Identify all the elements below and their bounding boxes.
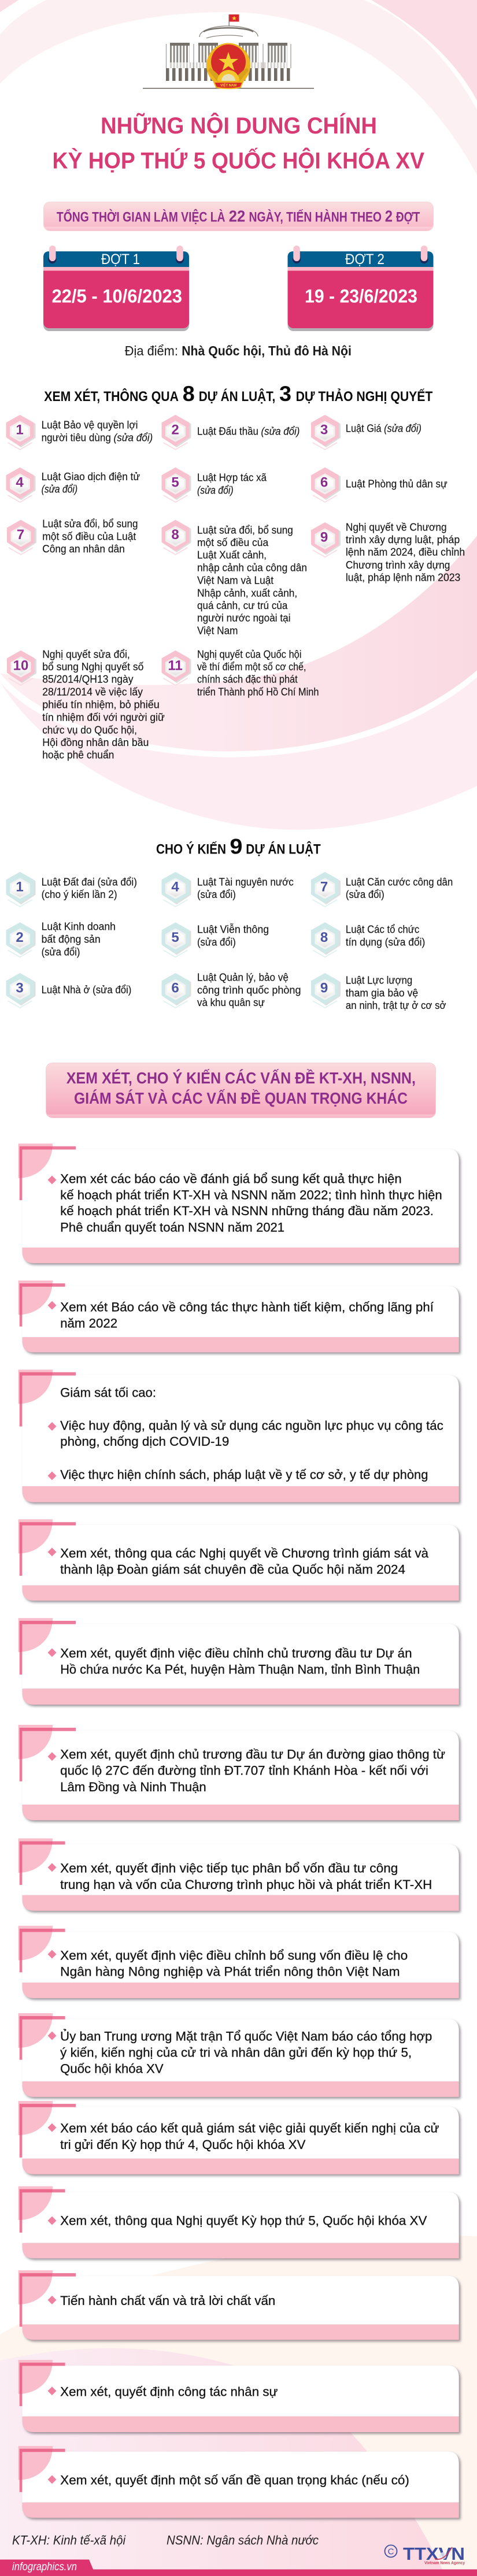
logo: TTXVN: C — [388, 2547, 394, 2556]
card 4: Xem xét, thông qua các Nghị quyết về Chương trình giám sát và — [60, 1546, 429, 1560]
opinion item 7: 7 — [320, 879, 328, 894]
law item 5: 5 — [171, 475, 179, 490]
law item 5: Luật Hợp tác xã — [197, 472, 267, 484]
opinion item 2: bất động sản — [42, 933, 101, 945]
resolution item 9: Chương trình xây dựng — [346, 559, 450, 571]
card 3: supreme supervision: Việc thực hiện chính sách, pháp luật về y tế cơ sở, y tế dự phòng — [60, 1468, 428, 1482]
card 9: Quốc hội khóa XV — [60, 2061, 164, 2076]
law item 6 — [312, 468, 448, 502]
opinion item 9: tham gia bảo vệ — [346, 986, 418, 999]
law item 8: Luật Xuất cảnh, — [197, 549, 267, 561]
card 1: kế hoạch phát triển KT-XH và NSNN năm 2022; tình hình thực hiện — [60, 1188, 442, 1202]
resolution item 10: Hội đồng nhân dân bầu — [42, 736, 149, 748]
card 14: Xem xét, quyết định một số vấn đề quan trọng khác (nếu có) — [60, 2473, 409, 2487]
law item 8: Luật sửa đổi, bổ sung — [197, 524, 293, 536]
law item 2: 2 — [171, 422, 179, 438]
card 8: Xem xét, quyết định việc điều chỉnh bổ sung vốn điều lệ cho — [60, 1948, 408, 1962]
calendar card: phase 1: ĐỢT 1 — [101, 251, 140, 268]
card 14 — [19, 2446, 459, 2518]
opinion item 5: Luật Viễn thông — [197, 923, 269, 936]
resolution item 9: 9 — [320, 529, 328, 545]
opinion item 2: Luật Kinh doanh — [42, 920, 116, 933]
opinion item 8: tín dụng (sửa đổi) — [346, 936, 425, 948]
resolution item 9: trình xây dựng luật, pháp — [346, 533, 460, 545]
opinion item 4: (sửa đổi) — [197, 888, 236, 900]
opinion item 6 — [162, 971, 301, 1008]
law item 8: người nước ngoài tại — [197, 612, 291, 624]
opinion item 8: 8 — [320, 930, 328, 945]
card 7: Xem xét, quyết định việc tiếp tục phân bổ vốn đầu tư công — [60, 1861, 398, 1875]
resolution item 10: phiếu tín nhiệm, bỏ phiếu — [42, 699, 160, 711]
opinion item 5: 5 — [171, 930, 179, 945]
abbreviation notes: NSNN: Ngân sách Nhà nước — [167, 2533, 319, 2547]
opinion item 1: (cho ý kiến lần 2) — [42, 888, 117, 900]
calendar card: phase 1 — [43, 246, 189, 331]
opinion item 1: Luật Đất đai (sửa đổi) — [42, 875, 137, 888]
card 9: Ủy ban Trung ương Mặt trận Tổ quốc Việt Nam báo cáo tổng hợp — [60, 2029, 432, 2043]
opinion item 9: an ninh, trật tự ở cơ sở — [346, 999, 446, 1011]
card 3: supreme supervision: Giám sát tối cao: — [60, 1386, 156, 1400]
opinion item 8 — [312, 923, 425, 957]
calendar card: phase 2 — [288, 246, 434, 331]
location line: Nhà Quốc hội, Thủ đô Hà Nội — [182, 343, 352, 358]
opinion item 9: 9 — [320, 980, 328, 996]
law item 7: Công an nhân dân — [42, 543, 125, 555]
law item 8: Việt Nam — [197, 625, 238, 637]
card 5 — [19, 1618, 459, 1705]
opinion item 2 — [7, 920, 116, 957]
opinion item 2: 2 — [16, 930, 24, 945]
law item 1: 1 — [16, 422, 24, 438]
calendar card: phase 2: ĐỢT 2 — [345, 251, 384, 268]
card 7: trung hạn và vốn của Chương trình phục hồi và phát triển KT-XH — [60, 1877, 432, 1892]
opinion item 6: công trình quốc phòng — [197, 983, 301, 996]
banner: total working time: 2 — [385, 207, 393, 225]
location line: Địa điểm: — [125, 343, 178, 358]
law item 8: Việt Nam và Luật — [197, 574, 273, 586]
opinion item 6: 6 — [171, 980, 179, 996]
card 10: tri gửi đến Kỳ họp thứ 4, Quốc hội khóa XV — [60, 2137, 306, 2152]
opinion item 7: Luật Căn cước công dân — [346, 875, 453, 888]
title — [52, 112, 424, 173]
heading: 8 draft laws, 3 draft resolutions: 3 — [279, 382, 291, 406]
card 13 — [19, 2360, 459, 2432]
resolution item 10: hoặc phê chuẩn — [42, 749, 114, 761]
card 5: Hồ chứa nước Ka Pét, huyện Hàm Thuận Nam, tỉnh Bình Thuận — [60, 1662, 420, 1677]
card 2: năm 2022 — [60, 1316, 117, 1330]
card 13: Xem xét, quyết định công tác nhân sự — [60, 2385, 278, 2399]
opinion item 8: Luật Các tổ chức — [346, 923, 419, 936]
law item 7: 7 — [17, 527, 24, 543]
banner: total working time — [44, 202, 434, 231]
opinion item 4: 4 — [171, 879, 179, 894]
card 1: Phê chuẩn quyết toán NSNN năm 2021 — [60, 1220, 284, 1234]
footer bar with site name — [0, 2560, 477, 2576]
card 3: supreme supervision — [19, 1369, 459, 1502]
card 6: Xem xét, quyết định chủ trương đầu tư Dự án đường giao thông từ — [60, 1747, 445, 1762]
card 5: Xem xét, quyết định việc điều chỉnh chủ trương đầu tư Dự án — [60, 1646, 412, 1660]
resolution item 10: tín nhiệm đối với người giữ — [42, 711, 165, 723]
law item 1 — [7, 415, 153, 450]
resolution item 9: Nghị quyết về Chương — [346, 521, 447, 533]
banner: socio-economic and other issues: GIÁM SÁT VÀ CÁC VẤN ĐỀ QUAN TRỌNG KHÁC — [74, 1089, 408, 1107]
opinion item 3: 3 — [16, 980, 24, 996]
resolution item 11 — [162, 648, 319, 698]
resolution item 10: chức vụ do Quốc hội, — [42, 723, 137, 736]
resolution item 11: triển Thành phố Hồ Chí Minh — [197, 686, 319, 698]
resolution item 10: 10 — [13, 658, 28, 674]
resolution item 10: bổ sung Nghị quyết số — [42, 660, 143, 673]
opinion item 9 — [312, 974, 446, 1011]
logo: TTXVN — [385, 2544, 465, 2566]
resolution item 11: 11 — [168, 658, 183, 674]
banner: socio-economic and other issues — [46, 1063, 436, 1118]
resolution item 10: Nghị quyết sửa đổi, — [42, 648, 130, 660]
card 2 — [19, 1280, 459, 1352]
card 3: supreme supervision: Việc huy động, quản lý và sử dụng các nguồn lực phục vụ công tác — [60, 1418, 443, 1432]
law item 6: Luật Phòng thủ dân sự — [346, 477, 448, 489]
banner: total working time: TỔNG THỜI GIAN LÀM VIỆC LÀ — [57, 209, 225, 225]
title: KỲ HỌP THỨ 5 QUỐC HỘI KHÓA XV — [52, 147, 424, 173]
card 7 — [19, 1839, 459, 1911]
card 1: Xem xét các báo cáo về đánh giá bổ sung kết quả thực hiện — [60, 1172, 402, 1186]
law item 4 — [7, 468, 140, 502]
card 4 — [19, 1519, 459, 1601]
law item 8 — [162, 521, 307, 637]
abbreviation notes: KT-XH: Kinh tế-xã hội — [12, 2533, 126, 2547]
banner: total working time: 22 — [229, 207, 245, 225]
resolution item 10: 28/11/2014 về việc lấy — [42, 686, 143, 698]
card 8 — [19, 1926, 459, 1998]
card 6 — [19, 1725, 459, 1820]
opinion item 6: Luật Quản lý, bảo vệ — [197, 971, 289, 983]
law item 3: Luật Giá (sửa đổi) — [346, 422, 421, 435]
law item 8: 8 — [171, 527, 179, 543]
resolution item 10: 85/2014/QH13 ngày — [42, 673, 134, 685]
opinion item 4 — [162, 873, 294, 907]
icon: flag — [229, 14, 239, 27]
law item 8: quá cảnh, cư trú của — [197, 599, 288, 611]
law item 4: (sửa đổi) — [42, 483, 77, 495]
card 4: thành lập Đoàn giám sát chuyên đề của Quốc hội năm 2024 — [60, 1562, 405, 1576]
law item 1: Luật Bảo vệ quyền lợi — [42, 419, 138, 431]
dome — [199, 26, 258, 38]
resolution item 11: về thí điểm một số cơ chế, — [197, 660, 306, 673]
law item 4: Luật Giao dịch điện tử — [42, 470, 140, 482]
logo: TTXVN: TTXVN — [403, 2544, 465, 2564]
law item 8: Nhập cảnh, xuất cảnh, — [197, 587, 297, 599]
heading: 8 draft laws, 3 draft resolutions: DỰ THẢO NGHỊ QUYẾT — [296, 388, 433, 404]
calendar card: phase 2: 19 - 23/6/2023 — [305, 286, 417, 307]
heading: 8 draft laws, 3 draft resolutions: 8 — [183, 382, 195, 406]
law item 3 — [312, 415, 421, 450]
opinion item 1 — [7, 873, 137, 907]
card 6: quốc lộ 27C đến đường tỉnh ĐT.707 tỉnh Khánh Hòa - kết nối với — [60, 1764, 428, 1778]
card 10: Xem xét báo cáo kết quả giám sát việc giải quyết kiến nghị của cử — [60, 2121, 439, 2136]
abbreviation notes — [12, 2533, 319, 2547]
opinion item 3 — [7, 974, 131, 1008]
law item 5 — [162, 468, 267, 502]
card 2: Xem xét Báo cáo về công tác thực hành tiết kiệm, chống lãng phí — [60, 1300, 434, 1315]
resolution item 10 — [8, 648, 165, 761]
opinion item 5 — [162, 923, 269, 957]
opinion item 9: Luật Lực lượng — [346, 974, 412, 986]
heading: 8 draft laws, 3 draft resolutions — [44, 382, 433, 406]
card 12 — [19, 2270, 459, 2340]
heading: opinions on 9 draft laws — [156, 835, 321, 859]
card 11: Xem xét, thông qua Nghị quyết Kỳ họp thứ 5, Quốc hội khóa XV — [60, 2213, 427, 2228]
icon: national emblem — [206, 43, 250, 88]
opinion item 5: (sửa đổi) — [197, 936, 236, 948]
resolution item 11: chính sách đặc thù phát — [197, 673, 298, 685]
card 11 — [19, 2187, 459, 2258]
icon: national emblem: VIỆT NAM — [220, 83, 236, 88]
card 3: supreme supervision: phòng, chống dịch COVID-19 — [60, 1434, 229, 1449]
law item 4: 4 — [16, 475, 24, 490]
law item 2 — [162, 415, 299, 450]
law item 6: 6 — [320, 475, 328, 490]
resolution item 9: lệnh năm 2024, điều chỉnh — [346, 546, 465, 558]
banner: socio-economic and other issues: XEM XÉT, CHO Ý KIẾN CÁC VẤN ĐỀ KT-XH, NSNN, — [66, 1069, 416, 1087]
footer bar with site name: infographics.vn — [12, 2561, 77, 2573]
opinion item 1: 1 — [16, 879, 24, 894]
law item 1: người tiêu dùng (sửa đổi) — [42, 431, 153, 443]
law item 8: một số điều của — [197, 536, 269, 548]
building columns — [143, 43, 314, 89]
resolution item 11: Nghị quyết của Quốc hội — [197, 648, 302, 660]
card 8: Ngân hàng Nông nghiệp và Phát triển nông thôn Việt Nam — [60, 1965, 400, 1979]
opinion item 4: Luật Tài nguyên nước — [197, 875, 294, 888]
heading: opinions on 9 draft laws: 9 — [230, 835, 243, 859]
law item 3: 3 — [320, 422, 328, 438]
card 9 — [19, 2013, 459, 2097]
card 6: Lâm Đồng và Ninh Thuận — [60, 1780, 206, 1794]
opinion item 3: Luật Nhà ở (sửa đổi) — [42, 983, 131, 996]
card 10 — [19, 2101, 459, 2174]
calendar card: phase 1: 22/5 - 10/6/2023 — [52, 286, 182, 307]
heading: 8 draft laws, 3 draft resolutions: XEM XÉT, THÔNG QUA — [44, 388, 179, 404]
opinion item 7 — [312, 873, 453, 907]
opinion item 6: và khu quân sự — [197, 996, 265, 1008]
law item 5: (sửa đổi) — [197, 484, 234, 496]
law item 8: nhập cảnh của công dân — [197, 562, 307, 574]
heading: 8 draft laws, 3 draft resolutions: DỰ ÁN LUẬT, — [199, 388, 275, 404]
law item 7 — [8, 517, 138, 555]
heading: opinions on 9 draft laws: CHO Ý KIẾN — [156, 841, 226, 858]
banner: total working time: ĐỢT — [396, 209, 420, 225]
banner: total working time: NGÀY, TIẾN HÀNH THEO — [249, 209, 382, 225]
logo: TTXVN: Vietnam News Agency — [424, 2560, 465, 2566]
heading: opinions on 9 draft laws: DỰ ÁN LUẬT — [246, 841, 321, 858]
title: NHỮNG NỘI DUNG CHÍNH — [101, 112, 377, 139]
law item 2: Luật Đấu thầu (sửa đổi) — [197, 425, 299, 437]
resolution item 9: luật, pháp lệnh năm 2023 — [346, 571, 460, 583]
icon: National Assembly building with emblem — [143, 14, 314, 89]
card 9: ý kiến, kiến nghị của cử tri và nhân dân gửi đến kỳ họp thứ 5, — [60, 2046, 412, 2060]
law item 7: một số điều của Luật — [42, 530, 136, 542]
resolution item 9 — [312, 521, 465, 583]
card 12: Tiến hành chất vấn và trả lời chất vấn — [60, 2293, 275, 2308]
law item 7: Luật sửa đổi, bổ sung — [42, 517, 138, 529]
card 1: kế hoạch phát triển KT-XH và NSNN những tháng đầu năm 2023. — [60, 1204, 434, 1218]
opinion item 7: (sửa đổi) — [346, 888, 384, 900]
opinion item 2: (sửa đổi) — [42, 945, 80, 957]
card 1 — [19, 1144, 459, 1263]
